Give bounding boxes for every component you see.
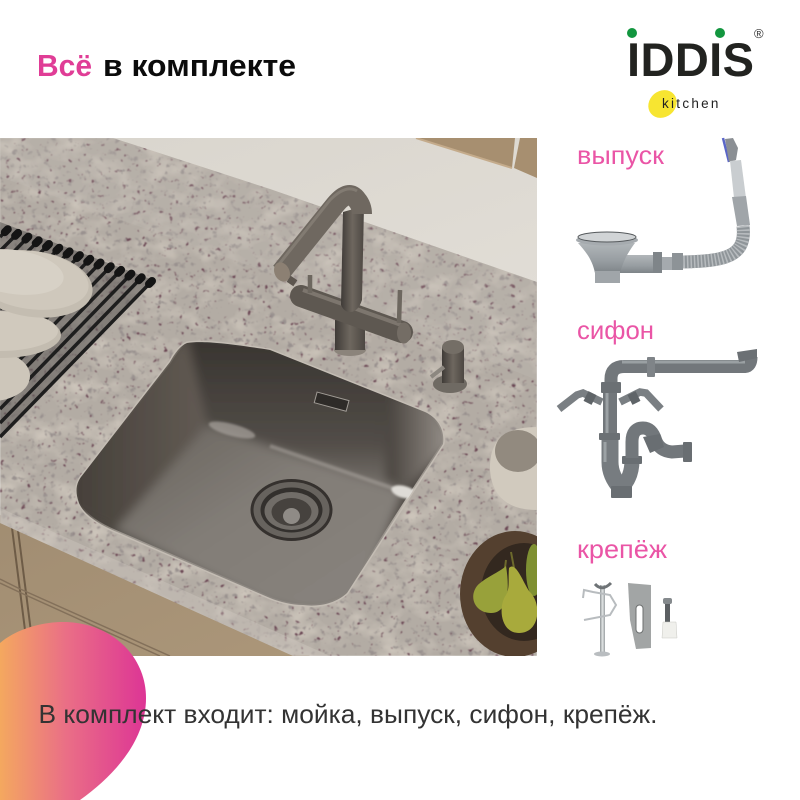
label: сифон: сифон bbox=[577, 315, 654, 345]
ceramic cup bbox=[490, 427, 541, 510]
sink bowl bbox=[70, 330, 450, 612]
icon: sink drain with overflow bbox=[576, 138, 750, 283]
sink highlights bbox=[207, 418, 418, 501]
soap dispenser bbox=[431, 340, 467, 393]
sink interior surfaces bbox=[70, 330, 450, 612]
logo: IDDIS kitchen: kitchen bbox=[662, 96, 720, 111]
icon: siphon bbox=[559, 349, 757, 498]
logo: IDDIS kitchen: IDDIS bbox=[627, 33, 754, 86]
icon: mounting clips bbox=[583, 583, 677, 656]
upper wood cabinets bbox=[416, 138, 537, 178]
granite countertop bbox=[0, 138, 537, 656]
drain bbox=[250, 479, 332, 541]
lower wood cabinets bbox=[0, 515, 310, 656]
title: Всё bbox=[37, 48, 92, 83]
drying rack bbox=[0, 222, 153, 437]
wall bbox=[0, 138, 537, 338]
label: крепёж: крепёж bbox=[577, 534, 668, 564]
brand plate bbox=[314, 392, 349, 411]
gradient blob bbox=[0, 622, 146, 800]
plates stack bbox=[0, 243, 97, 401]
faucet bbox=[271, 189, 411, 356]
wooden bowl with pears bbox=[460, 531, 537, 656]
logo: IDDIS kitchen: ® bbox=[754, 26, 764, 41]
bottom caption: В комплект входит: мойка, выпуск, сифон, крепёж. bbox=[38, 699, 657, 729]
title: в комплекте bbox=[103, 48, 296, 83]
label: выпуск: выпуск bbox=[577, 140, 665, 170]
photo: kitchen sink on granite countertop bbox=[0, 138, 570, 657]
logo: IDDIS kitchen bbox=[627, 26, 764, 124]
counter back ledge shade bbox=[0, 138, 537, 380]
counter front edge bbox=[0, 508, 330, 656]
